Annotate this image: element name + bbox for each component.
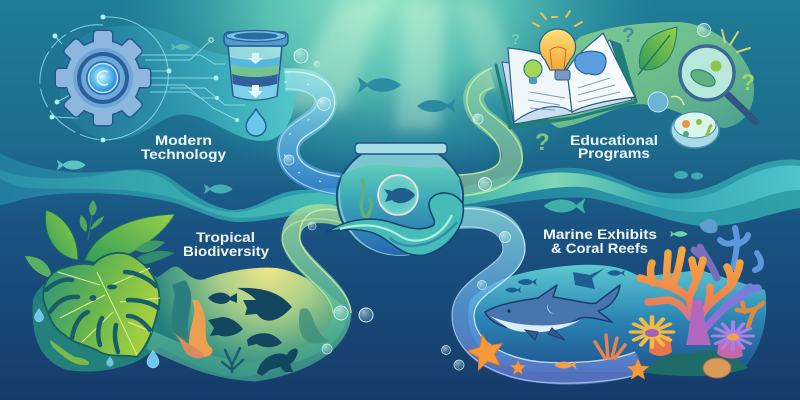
seaweed and coral <box>170 280 330 372</box>
panel: marine exhibits and coral reefs <box>452 209 766 383</box>
label: marine exhibits and coral reefs: Marine Exhibits <box>543 226 657 242</box>
icon: main coral <box>640 228 763 345</box>
label: tropical biodiversity <box>183 229 269 259</box>
marine background blob <box>468 265 766 374</box>
icon: petri dish <box>671 112 719 148</box>
ovals <box>674 171 703 180</box>
orange coral branches <box>640 250 740 340</box>
icon: open book <box>496 33 636 128</box>
tropical left base <box>33 262 200 372</box>
green pipe: education to bowl <box>458 68 522 196</box>
icon: background fish <box>57 43 585 214</box>
question marks: ? <box>535 129 550 156</box>
icon: bubble cell <box>648 92 668 112</box>
label: marine exhibits and coral reefs: & Coral Reefs <box>551 240 648 256</box>
icon: brain <box>575 51 606 75</box>
icon: magnifying glass <box>680 30 756 122</box>
icon: gear <box>56 31 150 125</box>
light rays <box>280 0 520 130</box>
panel: educational programs <box>496 11 756 161</box>
icon: small orange coral <box>595 335 625 358</box>
bowl fish bubble <box>378 175 418 215</box>
green pipe: bowl to tropical <box>150 214 345 372</box>
icon: orange anemone <box>631 317 673 356</box>
label: tropical biodiversity: Tropical <box>196 229 255 245</box>
icon: starfish <box>464 331 649 379</box>
icon: jungle leaves <box>25 200 175 278</box>
icon: gecko <box>50 340 89 365</box>
back purple coral <box>694 247 717 278</box>
label: educational programs: Educational <box>570 132 658 148</box>
question marks: ? <box>741 69 755 95</box>
blue pipe: technology to bowl <box>279 72 345 195</box>
icon: central fishbowl <box>327 143 463 257</box>
question marks: ? <box>511 31 520 48</box>
label: modern technology <box>141 132 226 162</box>
icon: rock <box>640 351 748 376</box>
small right coral <box>737 302 763 327</box>
label: modern technology: Technology <box>141 146 226 162</box>
tropical background blob <box>150 267 347 377</box>
wave band <box>0 153 800 226</box>
bowl seaweed <box>361 180 371 220</box>
icon: water drops <box>34 308 159 368</box>
wave right highlight <box>460 166 800 212</box>
icon: shark <box>485 285 620 340</box>
wave left highlight <box>0 170 350 218</box>
question marks <box>511 24 755 156</box>
icon: small bulb <box>524 60 542 84</box>
question marks: ? <box>622 24 635 47</box>
label: tropical biodiversity: Biodiversity <box>183 243 269 259</box>
circuit lines <box>40 17 245 140</box>
bubbles <box>284 24 710 370</box>
blue pipe: bowl to marine <box>458 217 640 374</box>
wave left base <box>0 153 350 222</box>
education background blob <box>544 22 754 128</box>
icon: small fish <box>554 361 577 369</box>
tech background blob <box>59 26 295 141</box>
circuit nodes <box>50 14 239 142</box>
small fish silhouettes <box>505 268 625 293</box>
icon: water filter cup <box>224 30 288 100</box>
label: modern technology: Modern <box>155 132 212 148</box>
icon: brain coral <box>703 358 731 378</box>
label: educational programs <box>570 132 658 161</box>
wave right base <box>455 160 800 226</box>
label: marine exhibits and coral reefs <box>543 226 657 256</box>
label: educational programs: Programs <box>578 145 650 161</box>
icon: monstera leaf <box>43 253 160 357</box>
panel: modern technology <box>40 14 295 162</box>
wave swirl <box>327 193 463 255</box>
icon: light bulb <box>533 11 582 80</box>
coral trunk <box>686 300 711 345</box>
arrow: cell to dish <box>671 96 684 105</box>
icon: water drop <box>246 109 266 136</box>
icon: fish silhouettes <box>208 288 298 376</box>
icon: purple anemone <box>713 322 753 359</box>
icon: top fish and bubble <box>670 219 718 237</box>
back blue coral <box>720 228 761 270</box>
panel: tropical biodiversity <box>25 200 351 377</box>
purple coral branches <box>700 287 758 335</box>
icon: leaf <box>638 27 677 75</box>
